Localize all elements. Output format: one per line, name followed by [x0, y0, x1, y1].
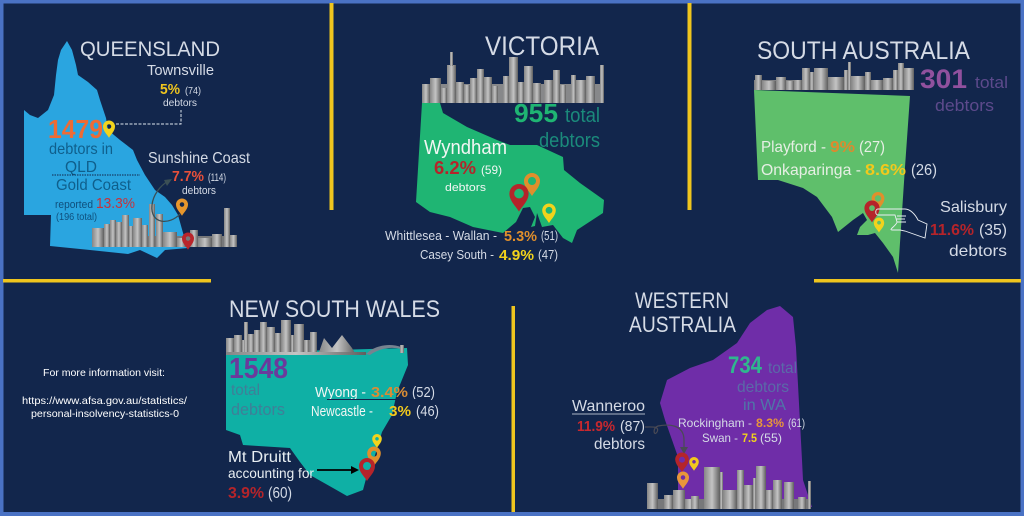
- icon: orange pin: [677, 472, 689, 489]
- title: [629, 288, 736, 337]
- skyline: Western Australia: [647, 466, 811, 509]
- text: url: https://www.afsa.gov.au/statistics/: [22, 395, 187, 407]
- icon: orange pin: [872, 192, 884, 210]
- total debtors: [514, 98, 600, 152]
- Gold Coast label: Gold Coast: [56, 177, 132, 194]
- icon: yellow pin: [542, 204, 556, 223]
- Rockingham label: (61): [788, 416, 805, 430]
- Playford label: 9%: [830, 139, 855, 156]
- Swan label: 7.5: [742, 431, 757, 445]
- Sunshine Coast label: Sunshine Coast: [148, 150, 250, 167]
- Sunshine Coast label: debtors: [182, 185, 216, 197]
- title: QUEENSLAND: [80, 38, 220, 61]
- icon: yellow pin: [874, 218, 884, 232]
- Swan label: Swan -: [702, 431, 738, 445]
- icon: orange pin: [176, 198, 188, 216]
- total debtors: [920, 64, 1008, 115]
- Townsville label: debtors: [163, 98, 197, 109]
- Newcastle label: 3%: [389, 403, 411, 420]
- Wyndham label: [424, 137, 507, 194]
- Rockingham label: 8.3%: [756, 416, 784, 430]
- skyline: New South Wales: [226, 320, 404, 355]
- Gold Coast label: (196 total): [56, 212, 97, 223]
- Onkaparinga label: (26): [911, 162, 937, 179]
- Salisbury label: Salisbury: [940, 199, 1007, 216]
- icon: pointing hand: [876, 209, 927, 238]
- Casey South label: 4.9%: [499, 247, 534, 264]
- title: SOUTH AUSTRALIA: [757, 37, 970, 65]
- map: South Australia: [754, 90, 910, 273]
- Casey South label: [420, 247, 558, 264]
- Mt Druitt label: 3.9%: [228, 485, 264, 502]
- icon: red pin: [675, 452, 689, 472]
- Wyndham label: 6.2%: [434, 158, 476, 178]
- Townsville label: (74): [185, 86, 201, 97]
- icon: yellow pin: [372, 434, 382, 448]
- Wyong label: Wyong -: [315, 384, 366, 401]
- icon: yellow pin: [103, 120, 115, 138]
- map: Queensland: [24, 41, 188, 258]
- Mt Druitt label: Mt Druitt: [228, 449, 292, 466]
- Wanneroo label: 11.9%: [577, 418, 615, 435]
- Whittlesea label: [385, 228, 558, 245]
- Wyndham label: Wyndham: [424, 137, 507, 159]
- Townsville label: 5%: [160, 81, 180, 98]
- text: url: [22, 395, 187, 420]
- Swan label: [702, 431, 782, 445]
- icon: red pin: [509, 184, 529, 212]
- icon: red pin: [182, 232, 194, 250]
- Mt Druitt label: [228, 449, 314, 502]
- Onkaparinga label: 8.6%: [865, 162, 906, 179]
- Sunshine Coast label: 7.7%: [172, 168, 204, 185]
- panel: New South Wales: [226, 296, 440, 502]
- Wanneroo label: debtors: [594, 436, 645, 453]
- panel: info: [22, 367, 187, 420]
- Wyndham label: debtors: [445, 182, 487, 194]
- total debtors: [229, 353, 288, 419]
- skyline: South Australia: [754, 62, 914, 90]
- icon: red pin: [359, 458, 375, 481]
- Playford label: Playford -: [761, 139, 826, 156]
- icon: orange pin: [367, 446, 381, 466]
- total debtors: 301: [920, 64, 967, 94]
- Wyong label: 3.4%: [371, 384, 408, 401]
- Wanneroo label: (87): [620, 418, 645, 435]
- title: AUSTRALIA: [629, 312, 736, 337]
- title: NEW SOUTH WALES: [229, 296, 440, 323]
- Wanneroo label: Wanneroo: [572, 398, 645, 415]
- Newcastle label: Newcastle -: [311, 403, 373, 420]
- icon: yellow pin: [689, 457, 699, 471]
- icon: red pin: [864, 200, 880, 222]
- Mt Druitt label: (60): [268, 485, 292, 502]
- text: more information: For more information visit:: [43, 367, 165, 379]
- Casey South label: Casey South -: [420, 247, 494, 262]
- icon: orange pin: [524, 173, 540, 196]
- arrow: Mt Druitt: [317, 466, 359, 474]
- panel: South Australia: [754, 37, 1008, 273]
- Salisbury label: debtors: [949, 243, 1007, 260]
- Mt Druitt label: accounting for: [228, 465, 314, 481]
- total debtors: 734: [728, 352, 763, 379]
- Gold Coast label: reported: [55, 199, 93, 211]
- total debtors: in WA: [743, 397, 786, 414]
- Onkaparinga label: [761, 162, 937, 179]
- arrow: Sunshine Coast: [152, 179, 180, 221]
- Wyndham label: (59): [481, 163, 502, 177]
- text: url: personal-insolvency-statistics-0: [31, 408, 179, 420]
- Whittlesea label: Whittlesea - Wallan -: [385, 228, 497, 243]
- total debtors: QLD: [65, 159, 97, 176]
- skyline: Victoria: [422, 52, 604, 103]
- title: VICTORIA: [485, 31, 599, 61]
- panel: Queensland: [24, 38, 250, 258]
- panel: Victoria: [385, 31, 604, 264]
- Sunshine Coast label: (114): [208, 172, 226, 184]
- total debtors: total: [768, 360, 797, 377]
- total debtors: total: [975, 73, 1008, 92]
- arrow: Wanneroo: [645, 425, 688, 454]
- title: WESTERN: [635, 288, 729, 313]
- Rockingham label: Rockingham -: [678, 416, 752, 430]
- total debtors: debtors in: [49, 141, 113, 158]
- Playford label: [761, 139, 885, 156]
- Newcastle label: (46): [416, 403, 439, 420]
- skyline: Queensland: [92, 204, 237, 247]
- total debtors: total: [231, 382, 260, 399]
- Gold Coast label: 13.3%: [96, 195, 135, 212]
- Gold Coast label: [55, 177, 135, 223]
- total debtors: 1479: [48, 114, 103, 144]
- Salisbury label: [930, 199, 1007, 260]
- Salisbury label: 11.6%: [930, 222, 974, 239]
- Onkaparinga label: Onkaparinga -: [761, 162, 861, 179]
- Townsville label: Townsville: [147, 62, 214, 79]
- Wyong label: [315, 384, 435, 401]
- total debtors: total: [565, 105, 600, 127]
- total debtors: [728, 352, 797, 414]
- total debtors: [48, 114, 113, 176]
- Salisbury label: (35): [979, 222, 1007, 239]
- Newcastle label: [311, 403, 439, 420]
- total debtors: debtors: [935, 96, 994, 115]
- Townsville label: [147, 62, 214, 109]
- panel: Western Australia: [572, 288, 812, 509]
- map: New South Wales: [226, 348, 408, 496]
- Casey South label: (47): [538, 247, 558, 262]
- Sunshine Coast label: [148, 150, 250, 197]
- total debtors: debtors: [539, 130, 600, 152]
- total debtors: 955: [514, 98, 558, 128]
- Playford label: (27): [859, 139, 885, 156]
- Rockingham label: [678, 416, 805, 430]
- Whittlesea label: 5.3%: [504, 228, 537, 245]
- total debtors: debtors: [737, 379, 789, 396]
- Wanneroo label: [572, 398, 645, 453]
- map: Victoria: [416, 103, 604, 243]
- map: Western Australia: [660, 306, 812, 507]
- Whittlesea label: (51): [541, 228, 558, 243]
- total debtors: 1548: [229, 353, 288, 385]
- Wyong label: (52): [412, 384, 435, 401]
- Swan label: (55): [760, 431, 782, 445]
- total debtors: debtors: [231, 400, 285, 419]
